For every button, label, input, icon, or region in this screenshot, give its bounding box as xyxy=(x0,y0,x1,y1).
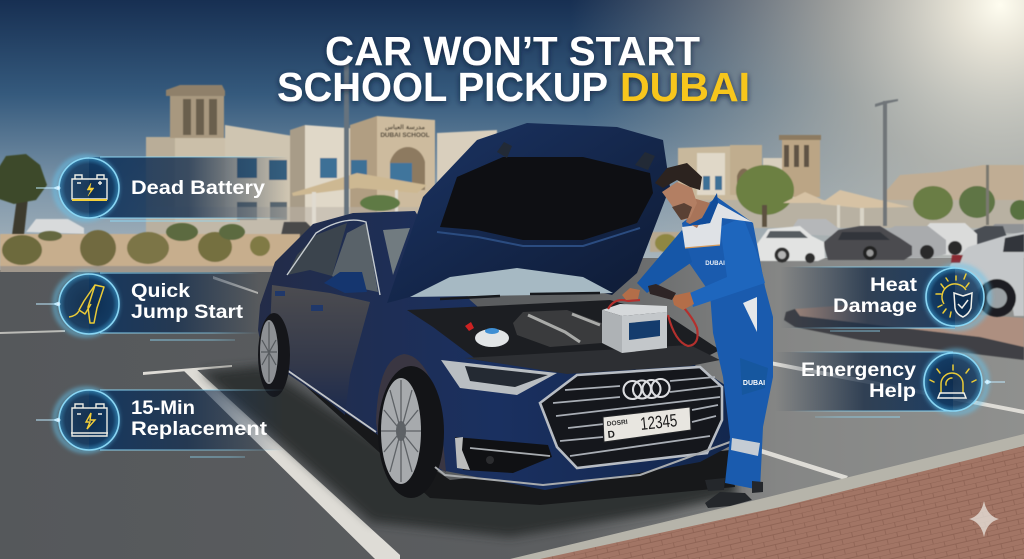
label line 1: Heat xyxy=(870,274,918,296)
callout: 15-minute replacement xyxy=(36,389,285,457)
title line 2: SCHOOL PICKUP xyxy=(277,64,608,110)
background: school building left: DUBAI SCHOOL xyxy=(380,132,430,139)
thigh pocket xyxy=(740,358,768,395)
multimeter tool xyxy=(648,284,676,300)
panel glow lines xyxy=(790,352,953,417)
shoes xyxy=(705,478,763,508)
number plate: 12345 xyxy=(639,410,678,434)
panel glow lines xyxy=(100,273,260,340)
car body xyxy=(258,211,732,490)
front grille xyxy=(540,367,722,468)
icon: sparkle watermark xyxy=(969,501,999,537)
trailing arm xyxy=(690,217,765,307)
parking markings xyxy=(0,276,1024,559)
label line 2: Replacement xyxy=(131,418,268,440)
panel xyxy=(89,273,260,333)
front wheel arch xyxy=(376,354,446,472)
background: asphalt parking lot xyxy=(0,258,1024,559)
hair xyxy=(655,163,702,190)
glow ring xyxy=(55,273,117,335)
callout: quick jump start xyxy=(36,273,260,340)
foreground brick pavement xyxy=(510,434,1024,559)
front door window xyxy=(332,223,378,292)
ring xyxy=(59,158,119,218)
rear wheel xyxy=(258,313,290,397)
background: desert landscaping strip xyxy=(0,223,300,273)
door handles xyxy=(275,291,323,311)
wipers xyxy=(440,293,600,299)
collar xyxy=(688,193,718,225)
leading arm xyxy=(637,230,692,293)
front wheel xyxy=(378,366,444,498)
icon: emergency beacon xyxy=(930,365,976,398)
label line 2: Damage xyxy=(833,295,917,317)
icon: sun with shield xyxy=(936,274,972,317)
glow ring xyxy=(55,157,117,219)
icon: jumper clamp xyxy=(69,285,104,323)
car: audi sedan xyxy=(258,123,732,498)
door mirror xyxy=(324,272,367,293)
label line 2: Jump Start xyxy=(131,301,244,323)
number plate: D xyxy=(607,429,616,441)
title highlight: DUBAI xyxy=(620,64,750,110)
background: left tree and cars xyxy=(0,154,313,240)
legs and torso xyxy=(682,197,773,490)
panel xyxy=(89,157,288,218)
panel glow lines xyxy=(100,390,285,457)
beard xyxy=(672,203,692,220)
hip white panel xyxy=(743,297,757,332)
icon: battery replacement xyxy=(71,404,108,436)
ring xyxy=(59,274,119,334)
panel glow lines xyxy=(100,157,288,221)
headlight xyxy=(441,360,557,395)
right kerb and brick sidewalk xyxy=(784,305,1024,360)
parked silver car right xyxy=(950,232,1024,317)
label line 2: Help xyxy=(869,380,916,402)
panel xyxy=(780,267,955,328)
panel xyxy=(89,390,285,450)
uniform chest text: DUBAI xyxy=(705,260,725,267)
callout: dead battery xyxy=(36,157,288,221)
ring xyxy=(926,268,984,326)
title xyxy=(277,28,750,110)
lens flare xyxy=(36,186,60,190)
orange piping xyxy=(685,245,720,248)
callout: heat damage xyxy=(780,266,989,331)
glow ring xyxy=(927,266,989,328)
lens flare xyxy=(985,380,1005,384)
rear side window xyxy=(287,223,347,276)
callout: emergency help xyxy=(775,351,1005,417)
car shadow on ground xyxy=(202,366,738,537)
audi rings xyxy=(624,379,670,399)
background: school building right xyxy=(650,99,1024,252)
background: sky xyxy=(0,0,1024,270)
icon: car battery xyxy=(72,175,107,200)
panel xyxy=(775,352,953,411)
windshield through bonnet gap xyxy=(410,268,613,297)
number plate: DOSRI xyxy=(606,419,628,428)
sill chrome xyxy=(284,368,376,432)
ring xyxy=(59,390,119,450)
school sign: مدرسة العباس xyxy=(385,124,425,131)
engine cover xyxy=(513,310,602,347)
front lip chrome xyxy=(435,442,730,485)
neck xyxy=(686,198,710,228)
label line 1: 15-Min xyxy=(131,397,195,419)
label line 1: Emergency xyxy=(801,359,916,381)
washer reservoir xyxy=(465,322,509,347)
lower air intake xyxy=(455,437,552,473)
ring xyxy=(924,353,982,411)
thigh pocket: DUBAI xyxy=(743,380,765,387)
background: parked cars right xyxy=(757,219,1024,263)
title line 1: CAR WON’T START xyxy=(325,28,700,74)
background: school building left xyxy=(146,60,497,237)
number plate xyxy=(603,407,691,442)
engine bay xyxy=(407,300,720,373)
hands xyxy=(622,288,694,310)
open bonnet xyxy=(387,123,670,303)
glow ring xyxy=(925,351,987,413)
glow ring xyxy=(55,389,117,451)
white shoulder yoke xyxy=(682,203,752,248)
jump leads xyxy=(608,296,698,346)
mechanic in blue uniform xyxy=(622,163,773,508)
door reflections xyxy=(270,285,370,415)
panel glow lines xyxy=(790,267,955,331)
face xyxy=(662,182,697,220)
hood slam panel xyxy=(465,345,720,374)
lens flare xyxy=(36,302,60,306)
label: Dead Battery xyxy=(131,177,265,199)
reflective strip xyxy=(731,438,760,456)
replacement battery on car xyxy=(602,304,667,353)
label line 1: Quick xyxy=(131,280,190,302)
lens flare xyxy=(36,418,60,422)
windshield side xyxy=(383,228,410,275)
